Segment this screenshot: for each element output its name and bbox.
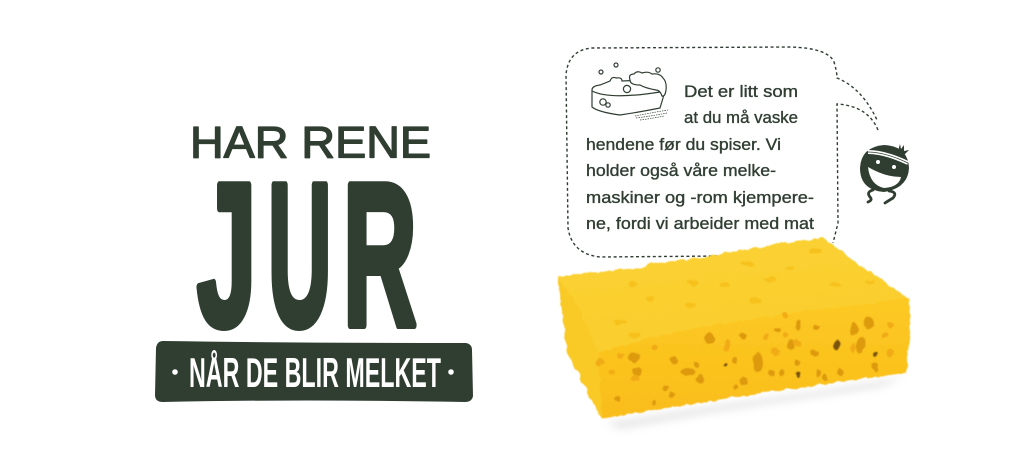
speech bubble outline — [566, 47, 878, 257]
heading: JUR: J — [197, 142, 257, 369]
bubble text: Det er litt som — [684, 83, 798, 101]
bubble text — [586, 83, 814, 233]
bubble text: holder også våre melke- — [586, 162, 776, 180]
bubble text: hendene før du spiser. Vi — [586, 136, 781, 154]
heading: JUR — [197, 142, 417, 369]
sponge photo — [557, 237, 911, 430]
icon: soap with bubbles — [592, 63, 668, 120]
bubble text: maskiner og -rom kjempere- — [586, 189, 814, 207]
bubble text: ne, fordi vi arbeider med mat — [586, 215, 814, 233]
icon: mascot — [860, 144, 909, 203]
banner: når de blir melket — [155, 341, 473, 402]
banner: når de blir melket: NÅR DE BLIR MELKET — [189, 349, 441, 396]
bubble text: at du må vaske — [684, 109, 798, 127]
heading: JUR: R — [343, 143, 417, 369]
heading: HAR RENE: HAR RENE — [190, 118, 431, 168]
heading: JUR: U — [268, 142, 332, 369]
